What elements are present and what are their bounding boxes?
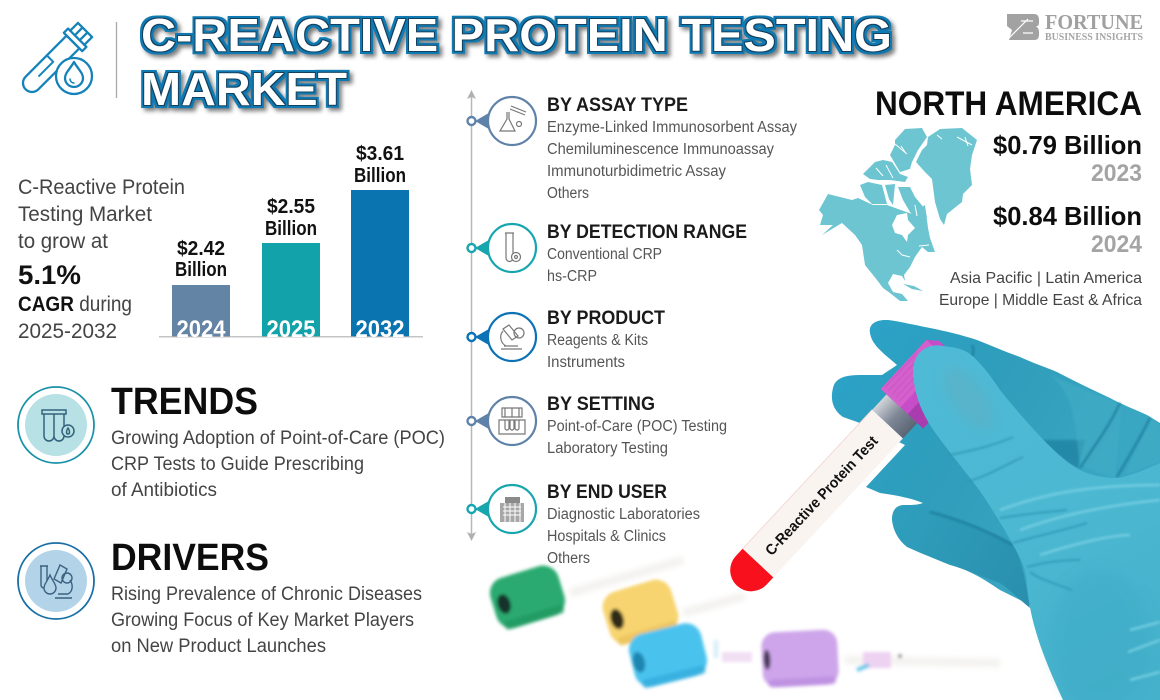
icon: hospital building node (468, 485, 536, 533)
panel: regional stats: 2023 (1091, 160, 1142, 187)
icon: tube node (468, 224, 536, 272)
icon: test tube with drop (16, 21, 94, 99)
panel: by detection range: Conventional CRP (547, 246, 662, 263)
panel: regional stats: NORTH AMERICA (875, 85, 1142, 123)
icon: drivers microscope (18, 543, 94, 619)
map: North America (819, 128, 977, 301)
bar chart: market size: Billion (265, 218, 317, 240)
panel: drivers: Rising Prevalence of Chronic Diseases (111, 584, 422, 605)
panel: by setting: BY SETTING (547, 394, 655, 415)
panel: drivers (18, 537, 422, 657)
bar chart: market size: 2032 (356, 316, 404, 343)
panel: by end user: Others (547, 550, 590, 567)
bar chart: market size: $2.42 (177, 238, 225, 260)
panel: by assay type: Others (547, 185, 589, 202)
text block: CAGR statement: 2025-2032 (18, 320, 117, 343)
panel: by assay type: BY ASSAY TYPE (547, 95, 688, 116)
text block: CAGR statement (18, 176, 185, 343)
panel: trends (18, 381, 445, 501)
timeline arrow (467, 90, 476, 541)
title: C-REACTIVE PROTEIN TESTING (141, 9, 892, 61)
panel: by product: BY PRODUCT (547, 308, 665, 329)
logo: Fortune Business Insights: BUSINESS INSIGHTS (1045, 31, 1143, 43)
panel: drivers: Growing Focus of Key Market Players (111, 610, 414, 631)
bar chart: market size: $2.55 (267, 196, 315, 218)
panel: by detection range: hs-CRP (547, 268, 597, 285)
panel: regional stats: $0.84 Billion (993, 201, 1142, 231)
panel: by product (468, 308, 665, 371)
panel: drivers: on New Product Launches (111, 636, 326, 657)
panel: trends: Growing Adoption of Point-of-Care (POC) (111, 428, 445, 449)
bar chart: market size (159, 143, 423, 343)
panel: drivers: DRIVERS (111, 537, 269, 579)
cap: green (486, 562, 569, 632)
panel: by setting: Laboratory Testing (547, 440, 668, 457)
icon: microscope node (468, 313, 536, 361)
panel: by detection range: BY DETECTION RANGE (547, 222, 747, 243)
text block: CAGR statement: to grow at (18, 230, 108, 253)
bar chart: market size: Billion (354, 165, 406, 187)
image: blood test tube (716, 334, 974, 605)
logo: Fortune Business Insights: FORTUNE (1045, 10, 1143, 34)
finger: lower (892, 505, 1030, 608)
panel: by setting (468, 394, 727, 457)
image: blurred tube caps (486, 560, 1000, 690)
panel: regional stats (875, 85, 1143, 309)
bar chart: market size: Billion (175, 259, 227, 281)
panel: by end user: BY END USER (547, 482, 667, 503)
panel: trends: TRENDS (111, 381, 258, 423)
panel: regional stats: 2024 (1091, 231, 1143, 258)
panel: by end user (468, 482, 700, 567)
text block: CAGR statement: C-Reactive Protein (18, 176, 185, 199)
panel: by product: Instruments (547, 354, 625, 371)
text block: CAGR statement: 5.1% (18, 260, 81, 290)
panel: by assay type: Immunoturbidimetric Assay (547, 163, 726, 180)
image: gloved thumb and palm (913, 345, 1160, 700)
panel: trends: CRP Tests to Guide Prescribing (111, 454, 364, 475)
panel: by product: Reagents & Kits (547, 332, 648, 349)
panel: by assay type: Chemiluminescence Immunoassay (547, 141, 774, 158)
panel: by detection range (468, 222, 747, 285)
panel: regional stats: Europe | Middle East & Africa (939, 292, 1142, 309)
title (141, 9, 892, 115)
cap: yellow (599, 576, 682, 648)
panel: by end user: Hospitals & Clinics (547, 528, 666, 545)
panel: regional stats: $0.79 Billion (993, 130, 1142, 160)
icon: flask node (468, 97, 536, 145)
text block: CAGR statement: CAGR during (18, 293, 132, 316)
cap: purple (761, 629, 839, 688)
bar chart: market size: $3.61 (356, 143, 404, 165)
icon: lab rack node (468, 397, 536, 445)
panel: trends: of Antibiotics (111, 480, 217, 501)
title: MARKET (141, 63, 347, 115)
panel: by assay type: Enzyme-Linked Immunosorbent Assay (547, 119, 797, 136)
image: blood test tube: C-Reactive Protein Test (762, 433, 882, 559)
panel: by assay type (468, 95, 797, 202)
image: gloved hand back (832, 320, 1160, 610)
panel: by end user: Diagnostic Laboratories (547, 506, 700, 523)
cap: blue (626, 620, 710, 690)
logo: Fortune Business Insights (1007, 10, 1143, 43)
icon: trends test tubes (18, 387, 94, 463)
bar chart: market size: 2025 (266, 316, 316, 343)
panel: by setting: Point-of-Care (POC) Testing (547, 418, 727, 435)
text block: CAGR statement: Testing Market (18, 203, 152, 226)
bar chart: market size: 2024 (176, 316, 226, 343)
panel: regional stats: Asia Pacific | Latin America (950, 270, 1142, 287)
